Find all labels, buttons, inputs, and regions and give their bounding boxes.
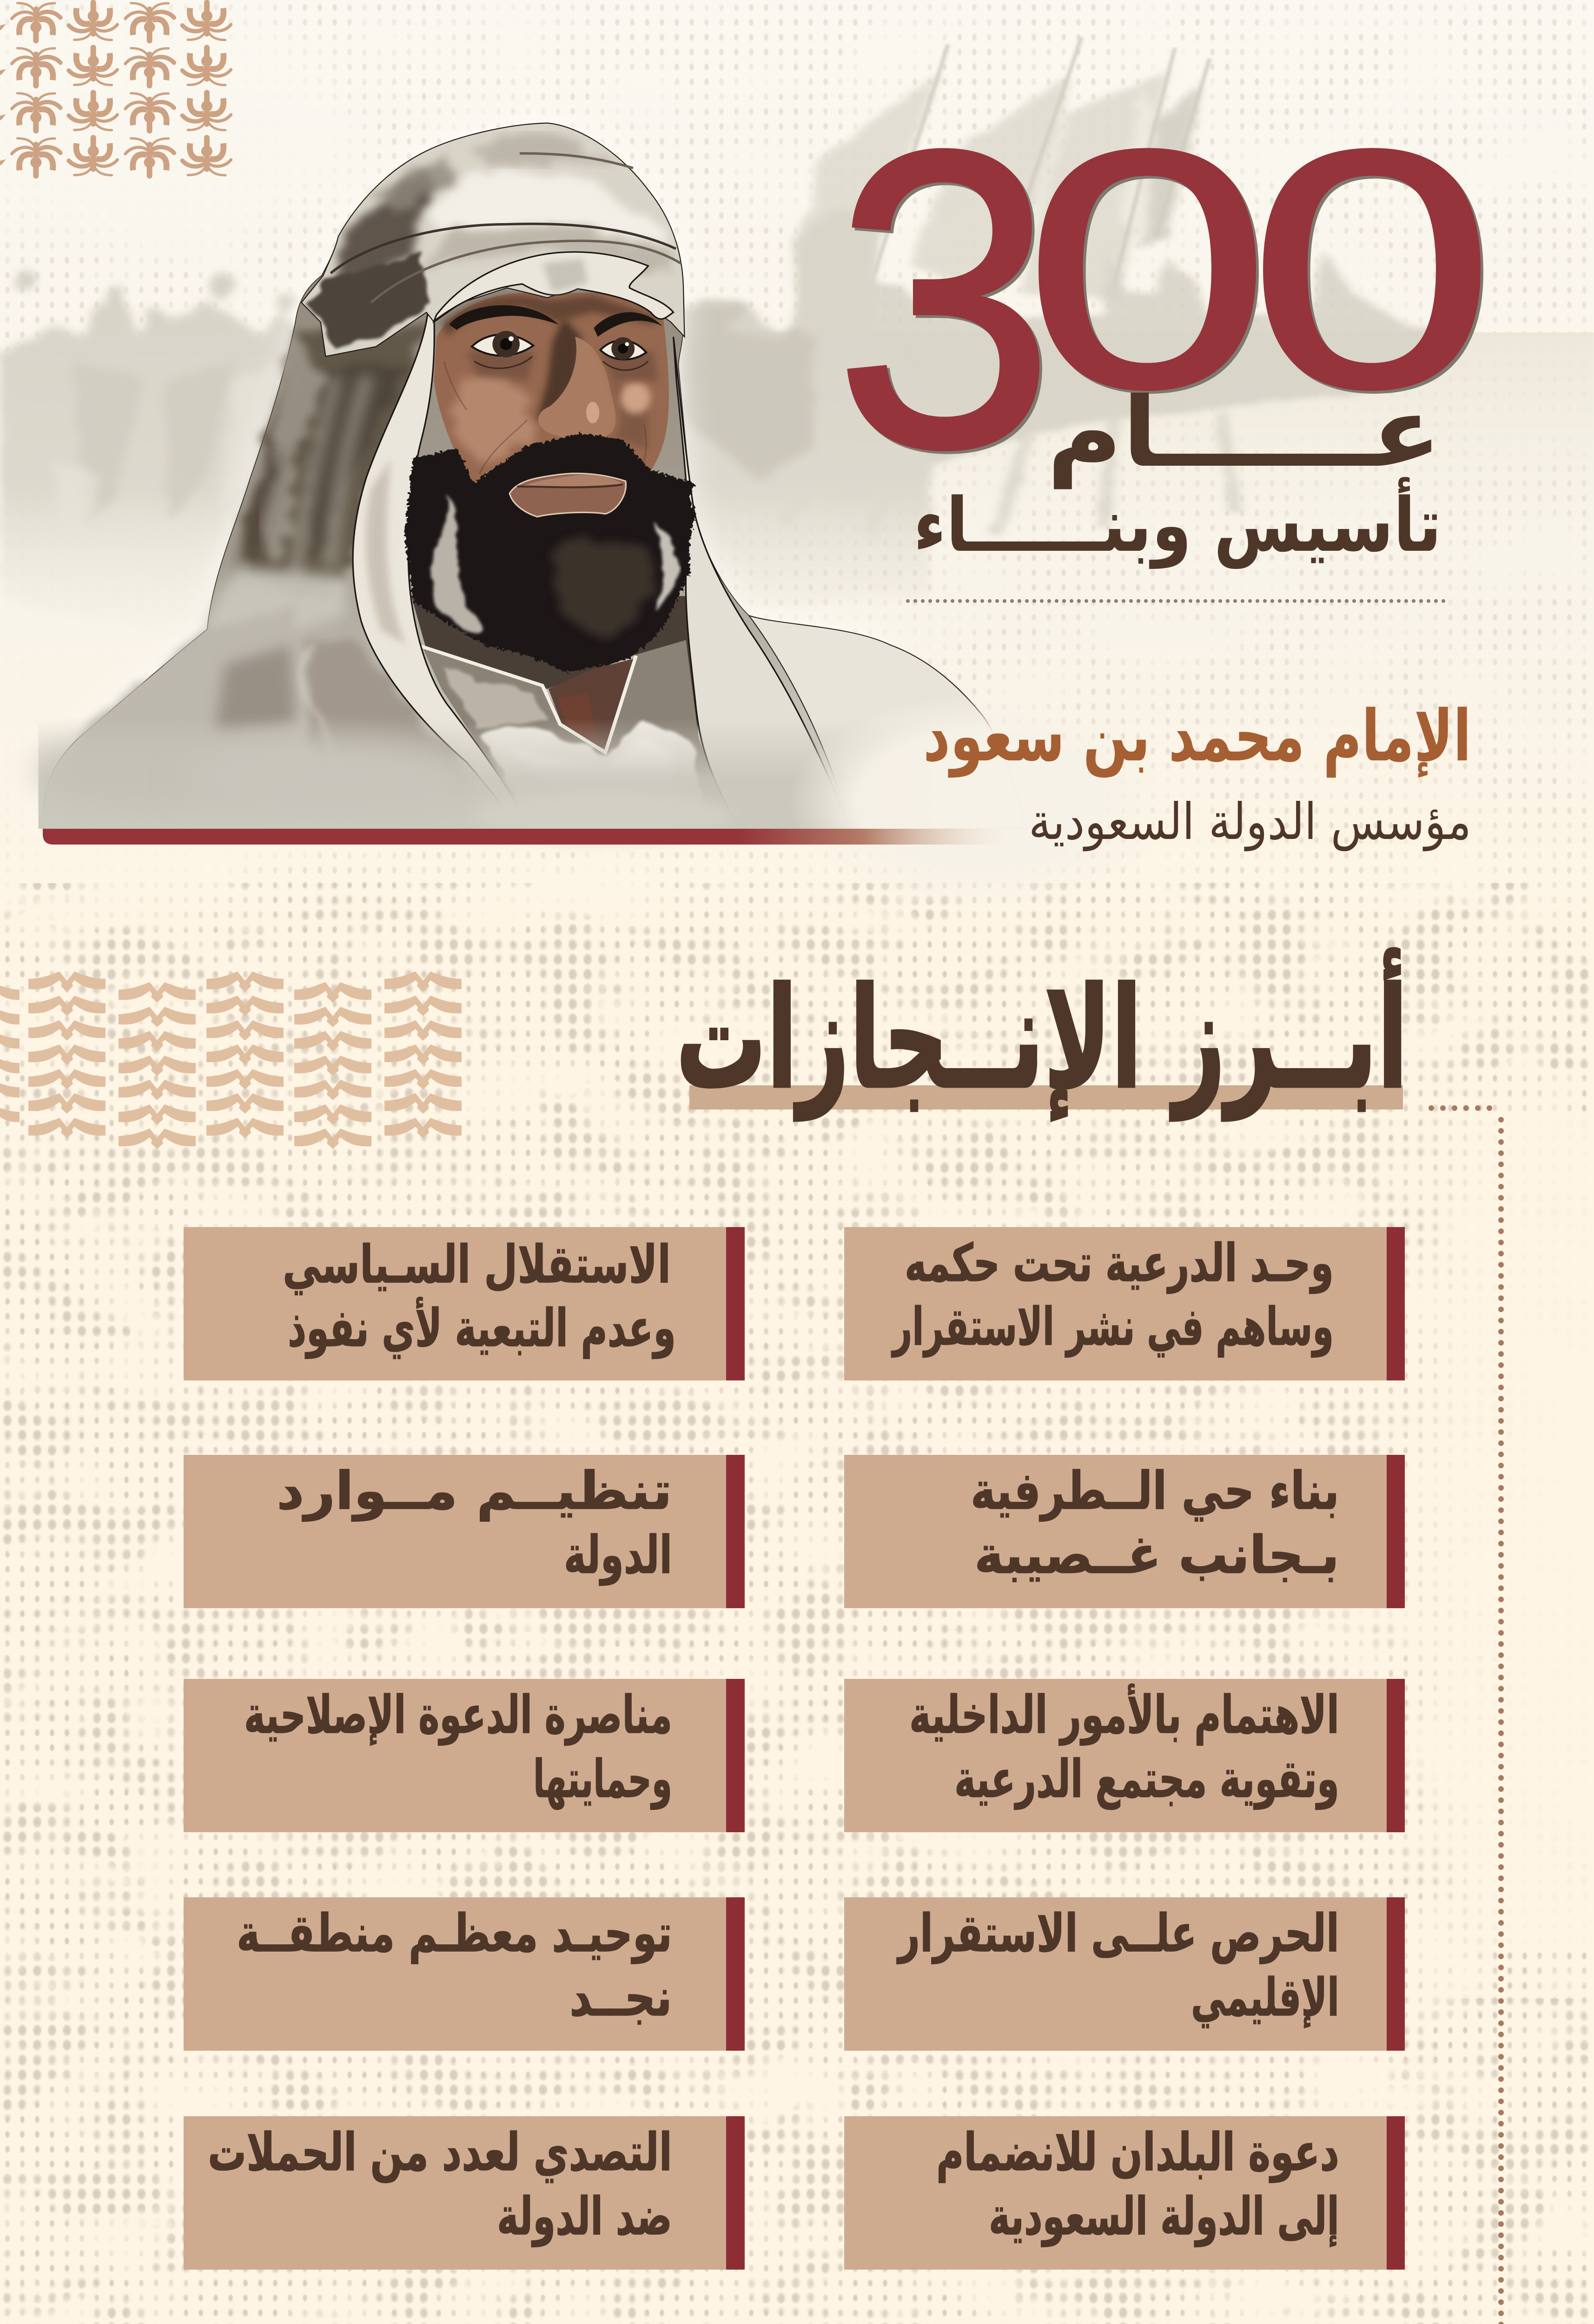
pattern: wing chevrons left [0, 971, 462, 1149]
eyes and brows [449, 305, 662, 370]
smoke over lower figure [39, 694, 1172, 909]
card: organizing resources [184, 1455, 745, 1608]
cloak [42, 123, 1026, 828]
card: supporting reform call: وحمايتها [533, 1749, 672, 1810]
red base bar [43, 829, 1009, 845]
card: organizing resources: تنظيــم مــوارد [277, 1461, 672, 1522]
card: inviting towns: إلى الدولة السعودية [989, 2186, 1339, 2247]
card: regional stability: الحرص علــى الاستقرار [896, 1903, 1339, 1964]
card: unified Diriyah: وساهم في نشر الاستقرار [891, 1297, 1334, 1358]
shoulder right [749, 615, 1026, 828]
portrait: Imam Muhammad bin Saud [39, 123, 1172, 909]
card: internal affairs: وتقوية مجتمع الدرعية [954, 1749, 1339, 1810]
card: political independence: وعدم التبعية لأي نفوذ [288, 1297, 676, 1359]
dotted connector [1431, 1108, 1501, 2324]
card: unified Diriyah [844, 1227, 1405, 1380]
card: Turaif district: بـجانب غــصيبة [974, 1525, 1339, 1585]
card: unifying Najd: نجــد [569, 1967, 672, 2028]
card: regional stability: الإقليمي [1191, 1967, 1339, 2028]
card: repelling campaigns [184, 2116, 745, 2270]
turban [301, 123, 684, 357]
face [434, 293, 669, 493]
card: repelling campaigns: التصدي لعدد من الحملات [208, 2122, 672, 2183]
thobe [422, 640, 734, 828]
riders silhouettes behind portrait [0, 208, 931, 645]
veil shading [73, 327, 477, 792]
subtitle: years: عــــــام [1047, 376, 1442, 489]
role: founder of the Saudi state: مؤسس الدولة السعودية [1029, 793, 1471, 852]
card: unified Diriyah: وحـد الدرعية تحت حكمه [905, 1233, 1334, 1294]
card: repelling campaigns: ضد الدولة [497, 2186, 672, 2247]
card: Turaif district: بناء حي الــطرفية [971, 1461, 1339, 1522]
card: internal affairs [844, 1679, 1405, 1832]
card: supporting reform call [184, 1679, 745, 1832]
subtitle: founding and building: تأسيس وبنــــــاء [913, 477, 1442, 569]
card: organizing resources: الدولة [564, 1525, 672, 1586]
card: inviting towns [844, 2116, 1405, 2270]
left ghutra strip [353, 315, 530, 828]
big number 300: 0 [1024, 80, 1271, 458]
card: internal affairs: الاهتمام بالأمور الداخلية [909, 1684, 1339, 1746]
card: unifying Najd [184, 1897, 745, 2051]
card: supporting reform call: مناصرة الدعوة الإصلاحية [244, 1685, 672, 1746]
card: political independence [184, 1227, 745, 1380]
card: regional stability [844, 1897, 1405, 2051]
big number 300: 3 [834, 63, 1055, 535]
card: political independence: الاستقلال السـياسي [283, 1235, 671, 1295]
dotted divider [908, 599, 1451, 603]
big number 300: 0 [1248, 80, 1495, 458]
card: unifying Najd: توحيـد معظـم منطقــة [237, 1903, 672, 1964]
historic photo backdrop: flags and riders [537, 37, 1594, 560]
heading band [689, 1085, 1403, 1109]
card: Turaif district [844, 1455, 1405, 1608]
pattern: palm emblems top-left [0, 2, 231, 176]
dark hollow around neck [411, 596, 699, 743]
right ghutra strip [674, 337, 850, 828]
beard [405, 434, 694, 672]
card: inviting towns: دعوة البلدان للانضمام [936, 2122, 1339, 2183]
big number 300 [834, 63, 1495, 535]
